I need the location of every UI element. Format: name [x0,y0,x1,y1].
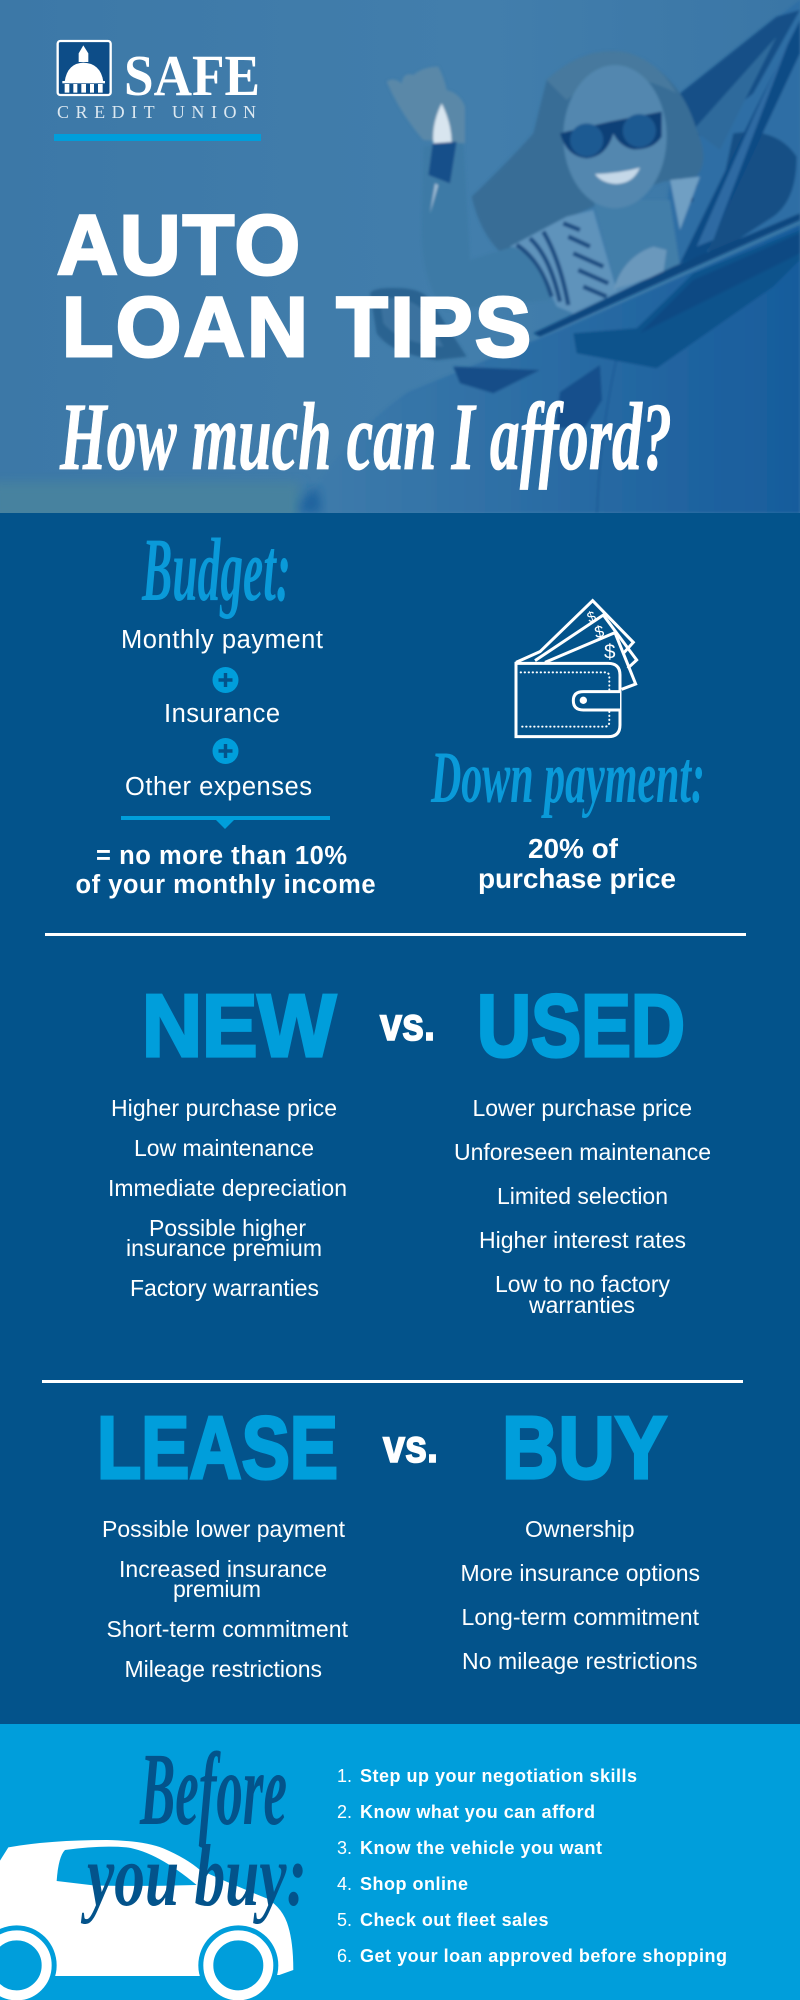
sum line with pointer [121,816,330,829]
sunglasses [560,112,662,158]
neck [594,200,681,271]
icon: wallet with cash: $ [585,609,598,627]
window frame + interior [660,0,800,267]
heading: vs: vs. [380,998,435,1050]
list: used pros and cons: Lower purchase price [472,1095,692,1121]
list: before you buy tips: Check out fleet sales [360,1910,548,1930]
list: before you buy tips: 1. [337,1766,352,1786]
hero photo: woman holding keys in car [0,0,800,522]
list: before you buy tips: Shop online [360,1874,468,1894]
heading: buy: BUY [502,1398,667,1497]
hair [472,81,703,251]
panel: budget: Monthly payment [121,626,323,654]
heading: before you buy: you buy: [81,1828,307,1925]
panel: lease vs buy [97,1398,700,1682]
icon: plus [212,667,238,693]
panel: before you buy [0,1724,800,2000]
smile [595,168,640,184]
panel: budget: of your monthly income [76,871,376,899]
list: before you buy tips: Get your loan approved before shopping [360,1946,727,1966]
far car: mirror [370,288,467,360]
icon: plus [212,738,238,764]
icon: white car [0,1840,293,2000]
shirt [510,210,638,316]
hand [387,67,465,143]
panel: navy background [0,513,800,1724]
list: buy pros and cons: Ownership [525,1516,635,1542]
list: before you buy tips: Know the vehicle you want [360,1838,602,1858]
panel: down payment: 20% of [528,833,619,864]
list: new pros and cons: Immediate depreciation [108,1175,347,1201]
panel: down payment [430,601,705,894]
list: used pros and cons: Limited selection [497,1183,668,1209]
face [563,65,667,208]
list: used pros and cons [454,1095,711,1318]
list: new pros and cons: Possible higher [149,1215,306,1241]
list: used pros and cons: Higher interest rates [479,1227,686,1253]
logo: CREDIT UNION [57,102,256,122]
list: before you buy tips [337,1766,727,1966]
panel: budget: = no more than 10% [96,842,347,870]
panel: budget [76,521,376,899]
icon: capitol dome [58,41,111,95]
icon: wallet with cash: $ [604,641,616,664]
list: before you buy tips: 6. [337,1946,352,1966]
list: before you buy tips: 4. [337,1874,352,1894]
door top edge + dark window reflection [533,213,800,337]
list: used pros and cons: Unforeseen maintenance [454,1139,711,1165]
list: lease pros and cons: Short-term commitment [106,1616,349,1642]
heading: lease: LEASE [97,1398,338,1497]
list: lease pros and cons: Possible lower payment [102,1516,346,1542]
list: lease pros and cons [102,1516,349,1682]
title: LOAN TIPS [62,280,531,374]
list: new pros and cons: Higher purchase price [111,1095,337,1121]
icon: wallet with cash [516,601,637,737]
heading: before you buy: Before [139,1732,287,1847]
panel: down payment: purchase price [478,863,676,894]
list: before you buy tips: 2. [337,1802,352,1822]
list: before you buy tips: Know what you can afford [360,1802,595,1822]
list: before you buy tips: 5. [337,1910,352,1930]
panel: budget: Insurance [164,700,280,728]
list: new pros and cons [108,1095,347,1301]
list: new pros and cons: insurance premium [126,1235,322,1261]
list: new pros and cons: Low maintenance [134,1135,314,1161]
logo [54,41,261,141]
heading: used: USED [477,976,685,1075]
heading: new: NEW [142,976,336,1075]
title [57,198,531,374]
list: before you buy tips: Step up your negotiation skills [360,1766,637,1786]
list: used pros and cons: warranties [528,1292,635,1318]
heading: before you buy [81,1732,307,1925]
logo: SAFE [124,43,260,108]
list: new pros and cons: Factory warranties [130,1275,319,1301]
panel: hero [0,0,800,522]
list: buy pros and cons: More insurance options [460,1560,700,1586]
list: buy pros and cons [460,1516,700,1674]
arm [429,145,542,277]
list: buy pros and cons: No mileage restrictions [462,1648,698,1674]
panel: new vs used [108,976,711,1318]
list: before you buy tips: 3. [337,1838,352,1858]
heading: vs: vs. [383,1420,438,1472]
panel: budget: Other expenses [125,773,312,801]
list: buy pros and cons: Long-term commitment [462,1604,700,1630]
icon: wallet with cash: $ [593,622,606,642]
heading: budget: Budget: [141,521,291,620]
list: lease pros and cons: Mileage restrictions [124,1656,322,1682]
list: lease pros and cons: premium [173,1576,261,1602]
list: used pros and cons: Low to no factory [495,1271,670,1297]
title: AUTO [57,198,300,292]
list: lease pros and cons: Increased insurance [119,1556,327,1582]
keys [433,103,452,143]
